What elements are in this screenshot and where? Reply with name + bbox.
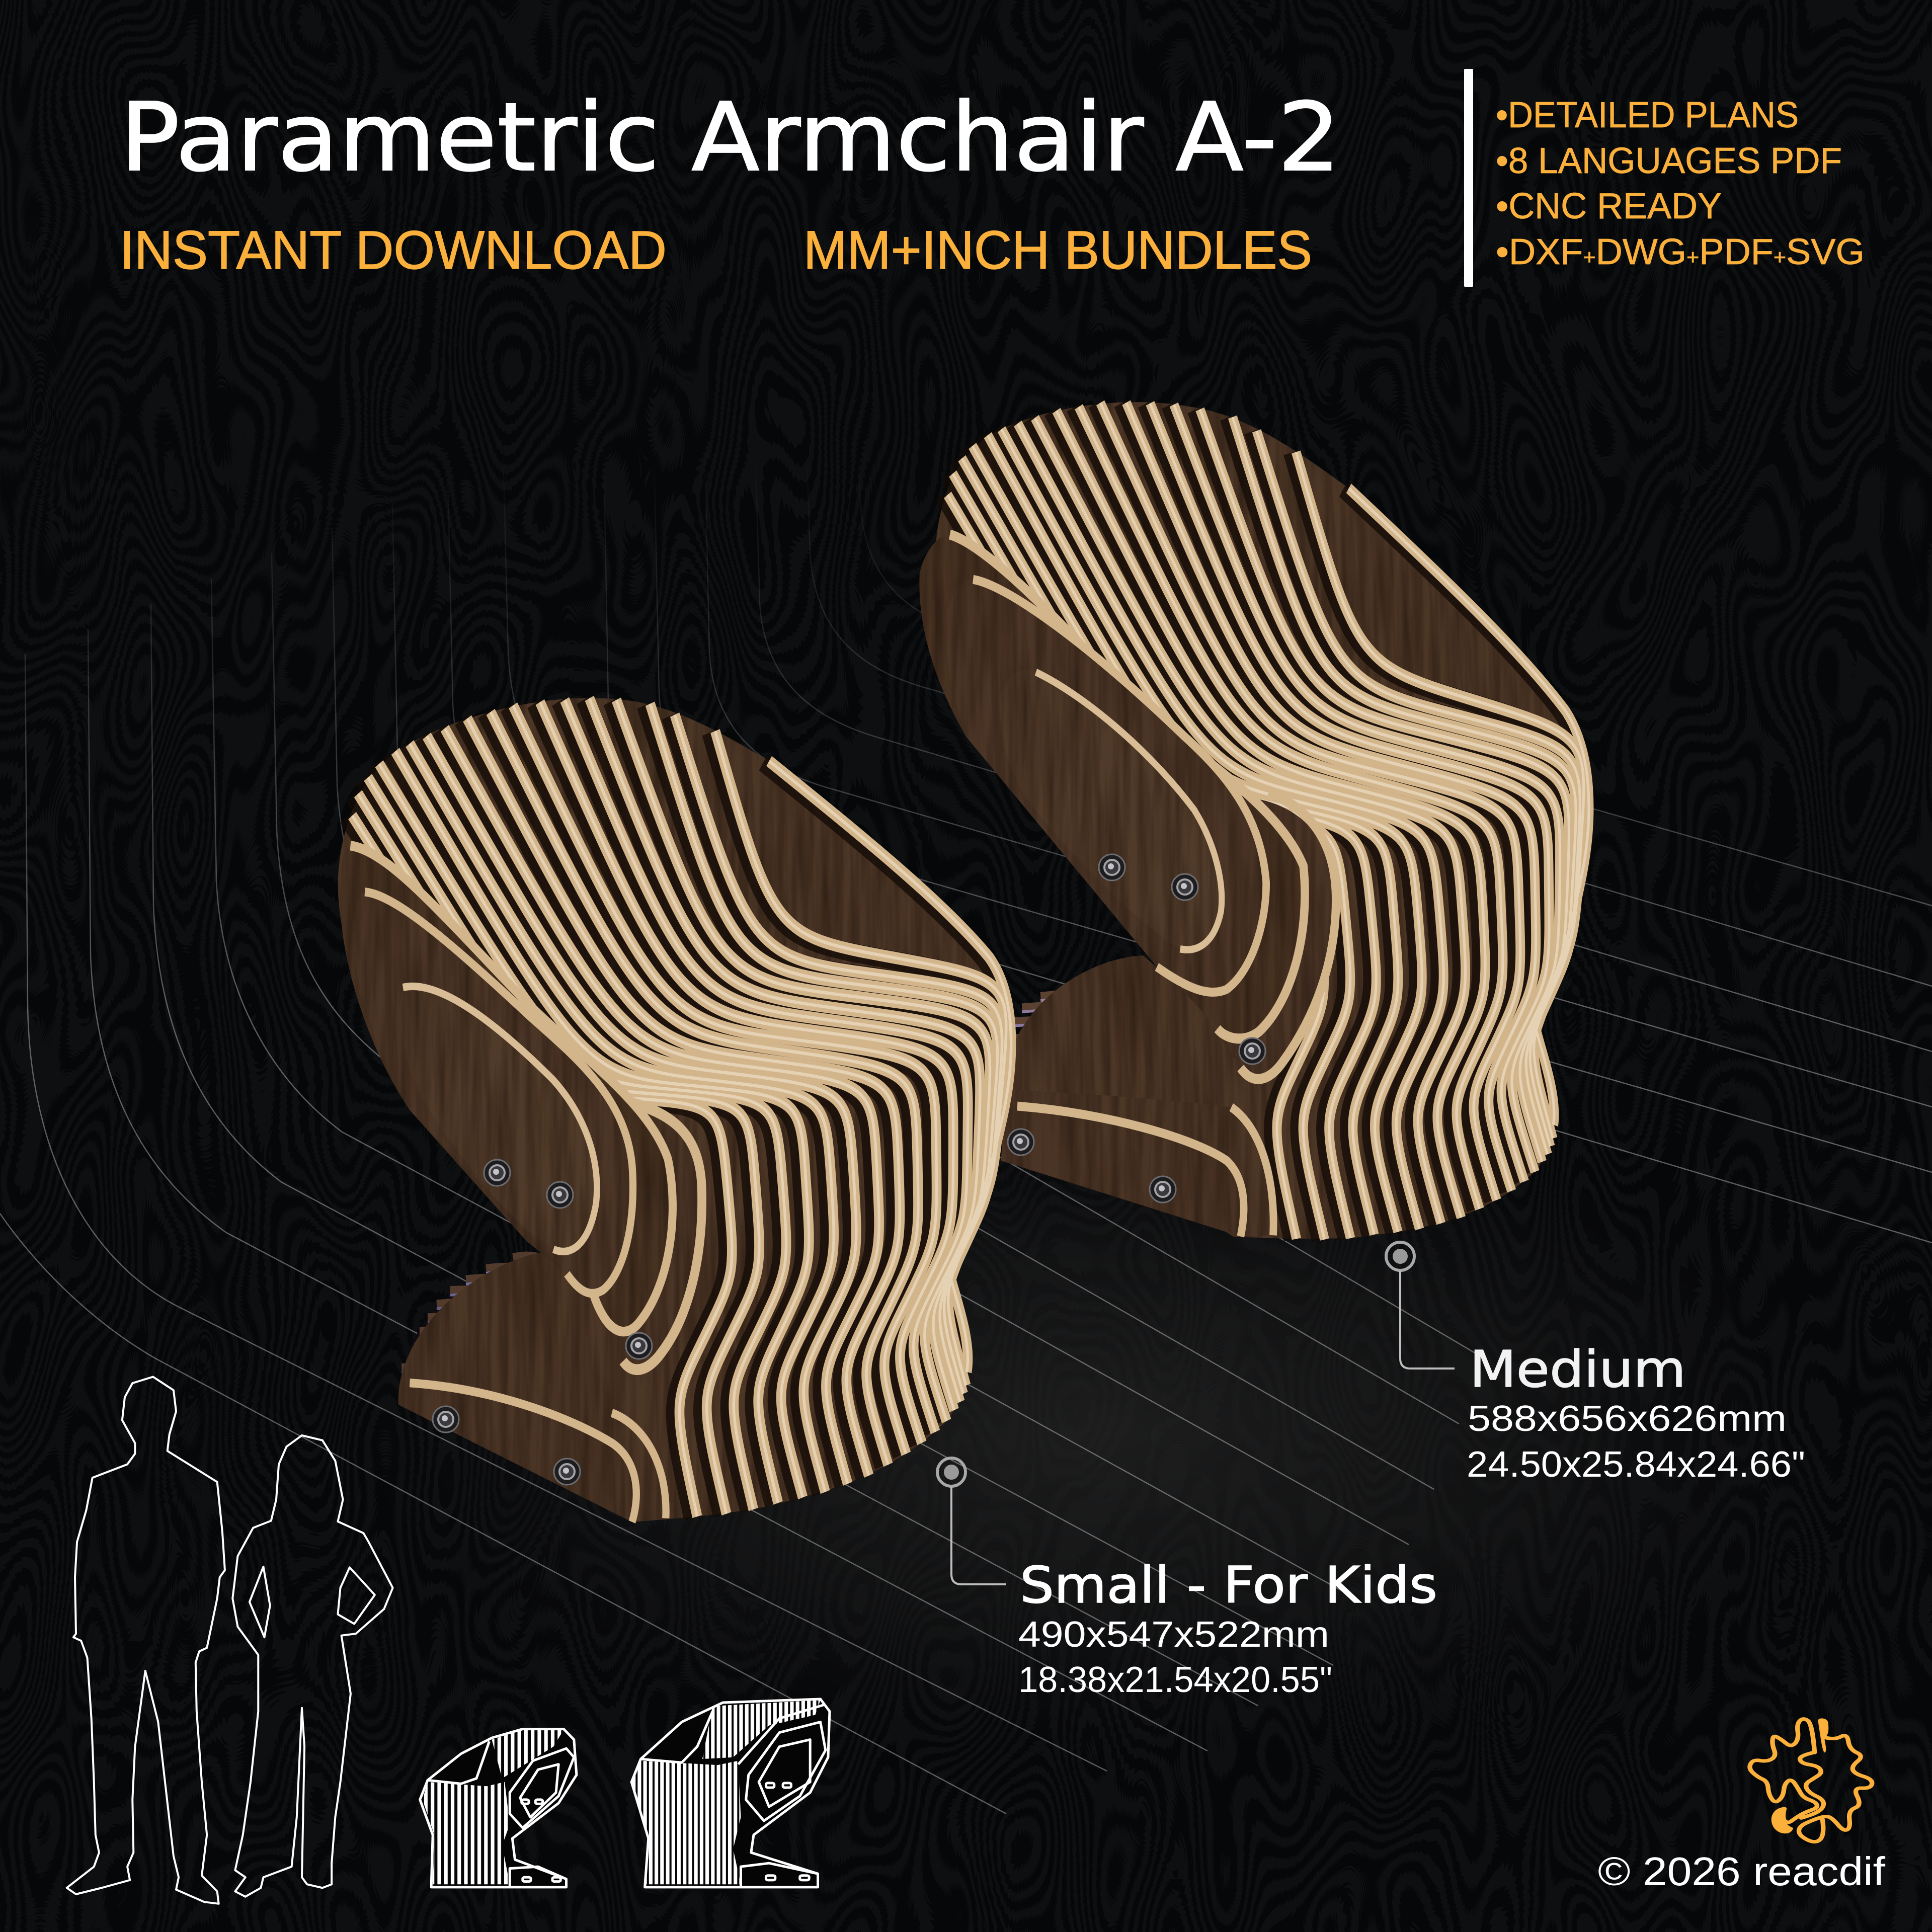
- small inch size: 18.38x21.54x20.55": [1018, 1660, 1332, 1700]
- small mm size: 490x547x522mm: [1018, 1615, 1329, 1655]
- small chair: base slats: [401, 1252, 632, 1393]
- perspective guide lines: [0, 352, 1932, 1814]
- icon: medium chair wireframe: [631, 1699, 830, 1887]
- floor glow: [352, 1112, 1862, 1756]
- small chair: bolts: [433, 1160, 652, 1485]
- medium pin: [1386, 1242, 1414, 1270]
- feature: cnc ready: •CNC READY: [1496, 186, 1722, 226]
- title: Parametric Armchair A-2: [120, 83, 1341, 193]
- medium heading: Medium: [1470, 1340, 1686, 1399]
- small chair: slatted body: [338, 698, 1012, 1522]
- medium chair: base slats: [1006, 967, 1241, 1113]
- medium mm size: 588x656x626mm: [1468, 1399, 1787, 1439]
- logo: reacdif blob: [1750, 1718, 1872, 1842]
- medium chair: [919, 375, 1601, 1281]
- feature list: [1496, 95, 1865, 272]
- medium leader line: [1400, 1271, 1455, 1369]
- feature: file formats: •DXF+DWG+PDF+SVG: [1496, 232, 1865, 272]
- small leader line: [951, 1487, 1006, 1584]
- small chair: front plates: [340, 846, 702, 1522]
- medium inch size: 24.50x25.84x24.66": [1467, 1444, 1805, 1485]
- small pin: [937, 1458, 965, 1486]
- medium chair: slatted body: [931, 375, 1601, 1281]
- feature: detailed plans: •DETAILED PLANS: [1496, 95, 1799, 135]
- copyright: © 2026 reacdif: [1598, 1849, 1886, 1894]
- chair icons: [420, 1699, 830, 1887]
- divider bar: [1464, 69, 1473, 287]
- feature: languages: •8 LANGUAGES PDF: [1496, 141, 1842, 181]
- medium chair: front plates: [919, 534, 1336, 1236]
- small chair: [338, 698, 1012, 1522]
- icon: small chair wireframe: [420, 1729, 577, 1887]
- icon: man outline: [67, 1377, 225, 1904]
- icon: woman outline: [232, 1435, 393, 1897]
- subtitle: instant download: INSTANT DOWNLOAD: [120, 219, 667, 280]
- medium chair: bolts: [1008, 854, 1265, 1202]
- callout: small: [937, 1458, 1437, 1700]
- human silhouettes: [67, 1377, 393, 1904]
- small heading: Small - For Kids: [1020, 1556, 1437, 1615]
- subtitle: bundles: MM+INCH BUNDLES: [803, 219, 1312, 280]
- callout: medium: [1386, 1242, 1805, 1485]
